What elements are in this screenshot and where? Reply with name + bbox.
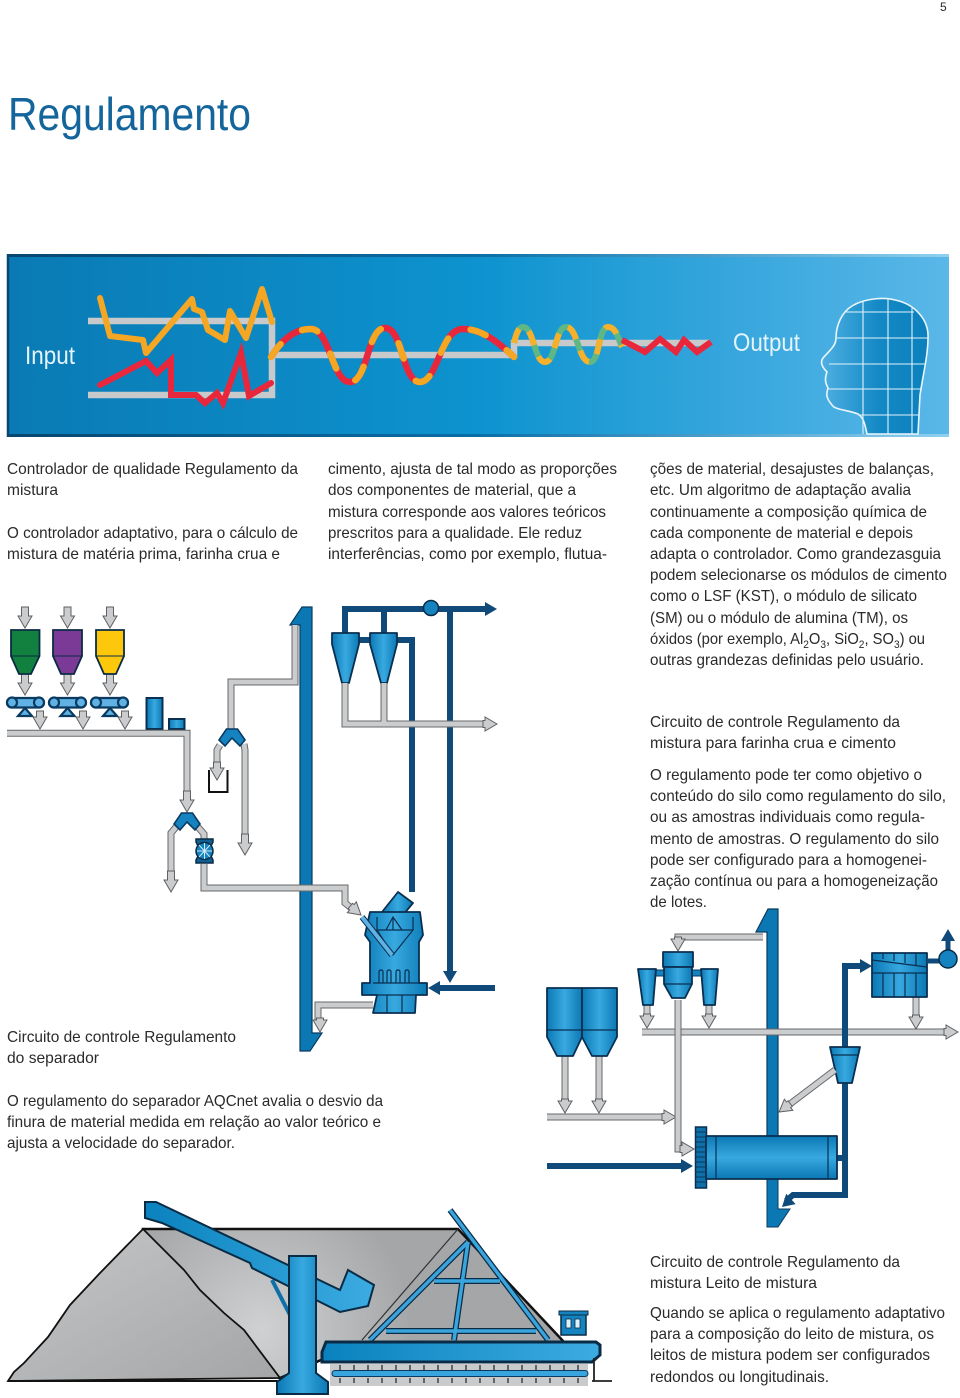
text: raw meal and cement control circuit: Circuito de controle Regulamento da [650, 714, 900, 731]
input signal: red [100, 353, 271, 403]
text: column three: continuamente a composição química de [650, 504, 927, 521]
text: column three: outras grandezas definidas pelo usuário. [650, 652, 924, 669]
text: raw meal and cement control circuit: ou as amostras individuais como regula- [650, 809, 925, 826]
text: column three: óxidos (por exemplo, Al [650, 631, 816, 648]
pile: edge of reclaimed face [362, 1229, 458, 1340]
text: column three: adapta o controlador. Como grandezasguia [650, 546, 941, 563]
diagram: separator with cyclones [638, 937, 763, 1156]
silo: yellow [96, 607, 124, 695]
diagram: raw material dosing [7, 607, 204, 892]
arrows onto belt [33, 711, 132, 729]
reclaimer bridge [322, 1342, 600, 1362]
text: column three: como o LSF (KST), o módulo de silicato [650, 588, 917, 605]
text: raw meal and cement control circuit: O regulamento pode ter como objetivo o [650, 767, 922, 784]
text: separator control circuit: finura de material medida em relação ao valor teórico e [7, 1114, 381, 1131]
text: raw meal and cement control circuit: mento de amostras. O regulamento do silo [650, 831, 939, 848]
harrow roller with teeth [330, 1364, 588, 1386]
text: blending bed control circuit: redondos ou longitudinais. [650, 1369, 829, 1386]
cyclone pair [332, 633, 397, 683]
label: output: Output [733, 329, 800, 357]
text: column three: podem selecionarse os módulos de cimento [650, 567, 947, 584]
text: column three: cada componente de material e depois [650, 525, 913, 542]
diagram: cement mill [547, 1047, 860, 1212]
text: column three: , SO [864, 631, 894, 648]
text: column three: O [809, 631, 820, 648]
text: raw meal and cement control circuit: pode ser configurado para a homogenei- [650, 852, 927, 869]
text: column one: Controlador de qualidade Regulamento da [7, 461, 298, 478]
output signal zigzag [622, 339, 711, 352]
text: blending bed control circuit: Circuito de controle Regulamento da [650, 1254, 900, 1271]
text: blending bed control circuit: leitos de mistura podem ser configurados [650, 1347, 930, 1364]
diagram: filter and fan [845, 929, 957, 1047]
pile: back [143, 1229, 564, 1378]
diagram: storage silos [547, 988, 617, 1113]
additive bins [146, 698, 184, 729]
text: raw meal and cement control circuit [650, 714, 946, 911]
text: column one: O controlador adaptativo, para o cálculo de [7, 525, 298, 542]
text: column three: , SiO [826, 631, 859, 648]
page number: 5 [940, 0, 947, 14]
stacker column [277, 1256, 328, 1394]
text: column one: mistura [7, 482, 58, 499]
stacker boom [145, 1202, 374, 1312]
text: column two: cimento, ajusta de tal modo as proporções [328, 461, 617, 478]
weigh feeders [7, 698, 128, 716]
text: separator control circuit: O regulamento do separador AQCnet avalia o desvio da [7, 1093, 383, 1110]
text: column three: 2 [803, 639, 809, 651]
diagram: vertical roller mill [313, 892, 495, 1032]
text: column two: mistura corresponde aos valores teóricos [328, 504, 606, 521]
diagram: riser one [290, 607, 322, 1051]
text: raw meal and cement control circuit: de lotes. [650, 894, 707, 911]
text: separator control circuit: ajusta a velocidade do separador. [7, 1135, 235, 1152]
text: separator control circuit: Circuito de controle Regulamento [7, 1029, 236, 1046]
text: blending bed control circuit [650, 1254, 945, 1386]
icon: rotary feeder with mill feed pipe [196, 839, 365, 920]
reclaimer frame [370, 1210, 548, 1340]
text: separator control circuit: do separador [7, 1050, 100, 1067]
operator cabin [559, 1311, 588, 1335]
text: column three: ções de material, desajustes de balanças, [650, 461, 934, 478]
main belt pipe [7, 733, 194, 812]
splitter and branches [164, 813, 204, 892]
banner: input to output signal [7, 254, 949, 437]
pile: front [8, 1229, 280, 1381]
text: separator control circuit [7, 1029, 383, 1152]
diagram: blending bed [8, 1202, 612, 1394]
wave one [271, 328, 514, 382]
rail support [592, 1358, 612, 1381]
text: column one [7, 461, 298, 563]
text: column two: interferências, como por exemplo, flutua- [328, 546, 607, 563]
text: column two [328, 461, 617, 563]
input signal: orange [100, 289, 272, 353]
label: input: Input [25, 342, 75, 370]
text: column three: 3 [894, 639, 900, 651]
icon: head with grid [822, 298, 928, 434]
text: raw meal and cement control circuit: conteúdo do silo como regulamento do silo, [650, 788, 946, 805]
text: column three: ) ou [900, 631, 925, 648]
diagram: riser two [756, 909, 778, 1136]
diagram: recirculation branch [209, 625, 295, 855]
wave two [514, 327, 622, 362]
text: column three: etc. Um algoritmo de adaptação avalia [650, 482, 911, 499]
diagram: gas pipes and cyclones [332, 600, 497, 983]
diagram: product belt [642, 1025, 958, 1039]
cyclone product pipe [345, 683, 497, 731]
text: column three: 3 [820, 639, 826, 651]
text: column three: 2 [859, 639, 864, 651]
text: column two: prescritos para a qualidade. Ele reduz [328, 525, 582, 542]
text: blending bed control circuit: Quando se aplica o regulamento adaptativo [650, 1305, 945, 1322]
text: column two: dos componentes de material, que a [328, 482, 576, 499]
silo: purple [53, 607, 82, 695]
banner grey baselines [88, 321, 710, 395]
silo: green [11, 607, 40, 695]
text: blending bed control circuit: para a composição do leito de mistura, os [650, 1326, 934, 1343]
diagram: clinker belt [547, 1110, 676, 1124]
title: Regulamento [8, 88, 251, 140]
text: raw meal and cement control circuit: zação contínua ou para a homogeneização [650, 873, 938, 890]
text: column one: mistura de matéria prima, farinha crua e [7, 546, 280, 563]
text: column three: (SM) ou o módulo de alumina (TM), os [650, 610, 908, 627]
text: blending bed control circuit: mistura Leito de mistura [650, 1275, 817, 1292]
diagram: lower riser two [767, 1179, 790, 1227]
text: column three [650, 461, 947, 669]
strut [272, 1280, 290, 1315]
text: raw meal and cement control circuit: mistura para farinha crua e cimento [650, 735, 896, 752]
